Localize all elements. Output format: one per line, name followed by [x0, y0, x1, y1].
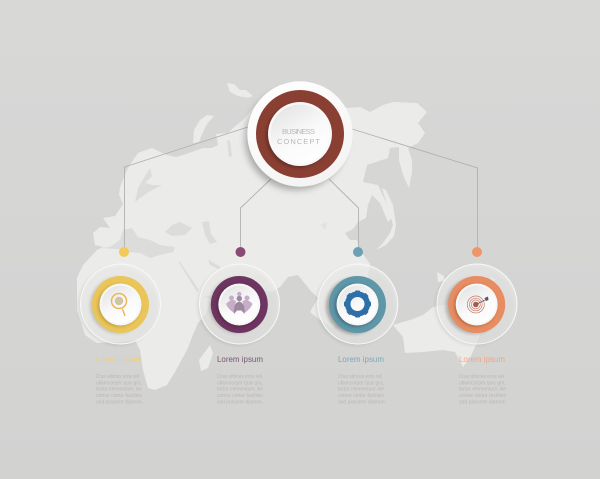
node 3: teal gear [316, 264, 398, 346]
column 3 body: sed posuere diamon. [338, 399, 386, 405]
column 2 body: conse ctetur facilisis [217, 393, 263, 399]
column 2 body: Cras ultrices eros vel [217, 374, 262, 380]
connector lines [124, 127, 478, 247]
column 2 body: sed posuere diamon, [217, 399, 263, 405]
column 3 label and text [338, 354, 386, 405]
column 1 body: sed posuere diamon, [96, 399, 143, 405]
column 4 body [459, 374, 507, 405]
column 1 body: conse ctetur facilisis [96, 393, 142, 399]
column 4 label and text [459, 354, 507, 405]
column 4 body: ullamcorper quis gra, [459, 380, 506, 386]
column 1 body: ullamcorper quis gra, [96, 380, 142, 386]
column 3 body: Cras ultrices eros vel [338, 374, 382, 380]
column 3 label and text: Lorem ipsum [338, 354, 384, 364]
column 2 label and text: Lorem ipsum [217, 354, 263, 364]
column 1 body [96, 374, 143, 405]
column 4 body: tortor elementum. Ae [459, 387, 506, 393]
central heading [277, 127, 320, 146]
world map [77, 83, 496, 390]
icon: people group [226, 292, 252, 314]
column 1 label and text [96, 354, 143, 405]
column 3 body: conse ctetur facilisis [338, 393, 384, 399]
central heading: BUSINESS [282, 127, 315, 136]
node 1: yellow search [78, 264, 160, 346]
icon: gear [344, 290, 371, 318]
column 3 body: ullamcorper quis gra, [338, 380, 384, 386]
column 2 label and text [217, 354, 263, 405]
column 2 body: ullamcorper quis gra, [217, 380, 263, 386]
column 3 body [338, 374, 386, 405]
column 4 body: sed posuere diamon. [459, 399, 507, 405]
central heading: CONCEPT [277, 137, 320, 146]
column 1 body: tortor elementum. Ae [96, 387, 142, 393]
column 2 body: tortor elementum. Ae [217, 387, 263, 393]
column 1 body: Cras ultrices eros vel [96, 374, 139, 380]
icon: target with arrow [467, 296, 488, 313]
column 4 body: Cras ultrices eros vel [459, 374, 504, 380]
icon: magnifier [112, 294, 126, 316]
connector dots [119, 247, 482, 257]
central circle: business concept [245, 81, 353, 190]
column 1 label and text: Lorem ipsum [96, 354, 142, 364]
node 4: orange target [435, 264, 517, 346]
column 2 body [217, 374, 263, 405]
column 3 body: tortor elementum. Ae [338, 387, 384, 393]
node 2: plum people [198, 264, 280, 346]
column 4 body: conse ctetur facilisis [459, 393, 506, 399]
column 4 label and text: Lorem ipsum [459, 354, 505, 364]
